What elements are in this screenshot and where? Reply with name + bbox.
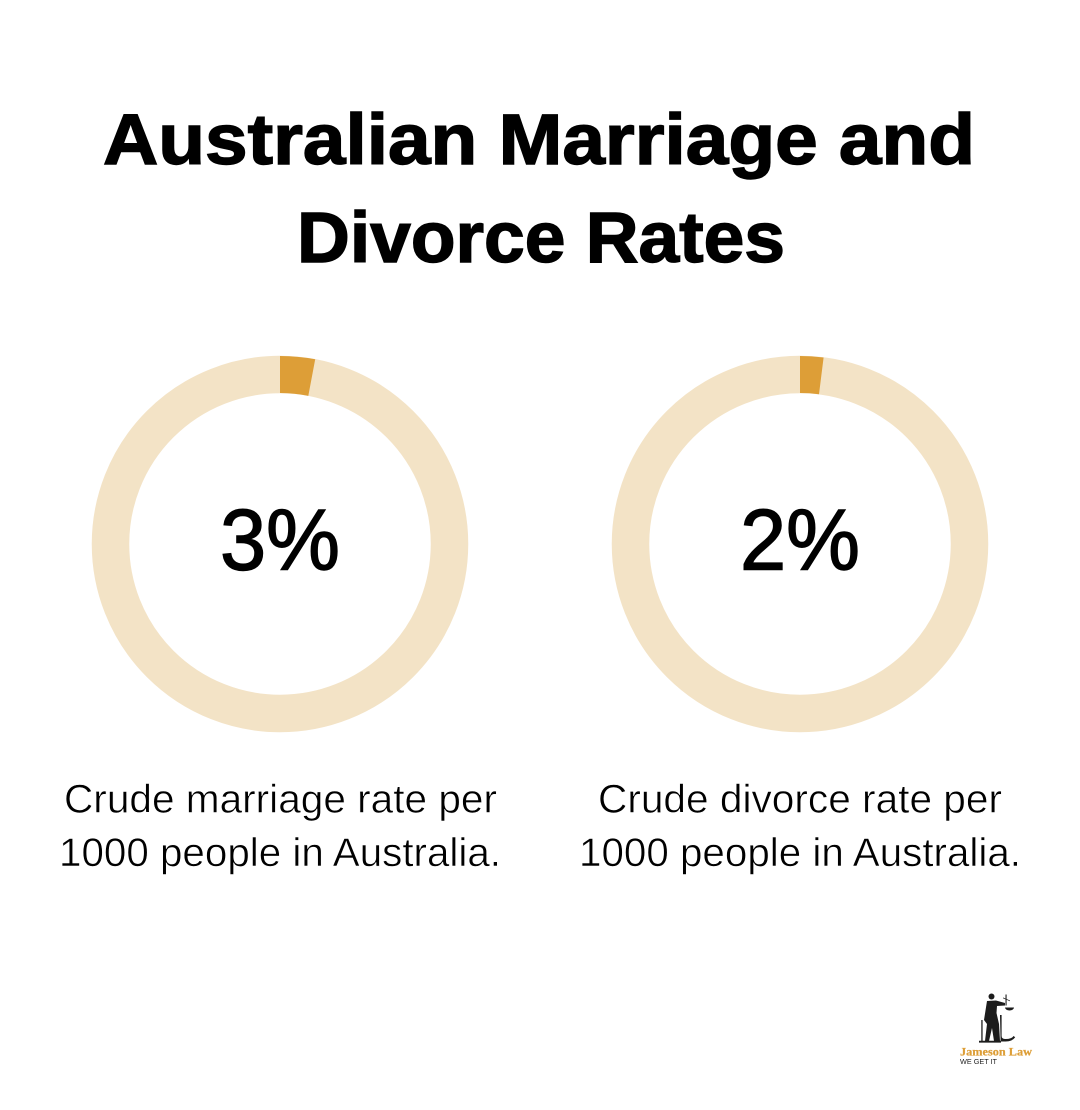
donut chart: 3% xyxy=(110,356,450,714)
title xyxy=(103,101,975,278)
logo name: Jameson Law xyxy=(960,1046,1033,1058)
icon: lady justice xyxy=(979,994,1015,1043)
caption: divorce xyxy=(579,778,1021,875)
logo: Jameson Law xyxy=(960,994,1033,1066)
panel: crude divorce rate xyxy=(579,356,1021,875)
caption: divorce: 1000 people in Australia. xyxy=(579,831,1021,875)
logo tagline: WE GET IT xyxy=(960,1057,997,1066)
title: Divorce Rates xyxy=(297,199,785,278)
value: 3%: 3% xyxy=(220,492,340,588)
panel: crude marriage rate xyxy=(59,356,501,875)
caption: divorce: Crude divorce rate per xyxy=(598,778,1002,822)
value: 2%: 2% xyxy=(740,492,860,588)
caption: marriage: Crude marriage rate per xyxy=(64,778,497,822)
title: Australian Marriage and xyxy=(103,101,975,180)
caption: marriage xyxy=(59,778,501,875)
caption: marriage: 1000 people in Australia. xyxy=(59,831,501,875)
donut chart: 2% xyxy=(630,356,970,714)
